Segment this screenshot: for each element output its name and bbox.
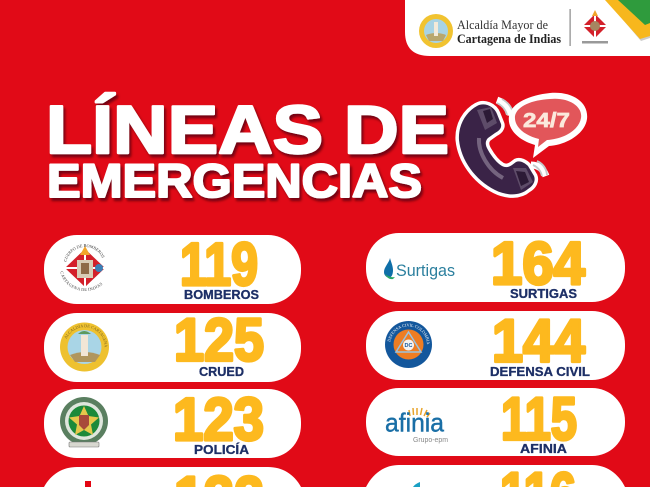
panel: defensa civil 144: 144 — [492, 308, 586, 374]
panel: surtigas 164 — [366, 230, 625, 302]
panel: crued 125: CRUED — [199, 365, 244, 379]
panel: acuacar 116 — [366, 460, 625, 487]
panel: defensa civil 144 — [366, 308, 625, 380]
sound waves — [497, 100, 546, 176]
panel: cruz roja 132 — [44, 464, 301, 487]
icon: afinia logo: Grupo-epm — [413, 437, 448, 444]
panel: bomberos 119: 119 — [180, 231, 258, 298]
icon: bomberos crest — [60, 244, 104, 291]
panel: defensa civil 144: DEFENSA CIVIL — [490, 365, 590, 379]
title: Líneas de: LÍNEAS DE — [46, 92, 449, 168]
panel: afinia 115: AFINIA — [520, 442, 567, 456]
icon: fire department crest — [582, 10, 608, 44]
icon: red cross — [85, 481, 91, 487]
panel: crued 125 — [44, 306, 301, 382]
speech bubble — [509, 93, 587, 158]
icon: afinia logo: afinia — [385, 408, 445, 438]
panel: crued 125: 125 — [174, 306, 264, 374]
title: Emergencias: EMERGENCIAS — [47, 154, 422, 207]
handset — [459, 104, 535, 194]
icon: water drop — [413, 482, 420, 487]
icon: crued seal — [60, 322, 109, 372]
panel: afinia 115 — [366, 386, 625, 456]
icon: city seal — [419, 14, 453, 48]
icon: crued seal: ALCALDÍA DE CARTAGENA — [64, 324, 108, 348]
panel: policia 123 — [44, 386, 301, 458]
panel: surtigas 164: 164 — [491, 230, 586, 297]
header text: Cartagena: Cartagena de Indias — [457, 31, 561, 46]
header logo panel — [405, 0, 650, 56]
icon: police crest — [60, 397, 108, 447]
icon: surtigas drop — [384, 258, 395, 279]
panel: bomberos 119 — [44, 231, 301, 304]
panel: surtigas 164: SURTIGAS — [510, 287, 577, 301]
icon: defensa civil seal: DEFENSA CIVIL COLOMBIANA — [388, 324, 430, 344]
panel: surtigas 164: Surtigas — [396, 262, 455, 280]
panel: bomberos 119: BOMBEROS — [184, 288, 259, 302]
icon: telephone with 24/7 speech bubble — [459, 93, 587, 194]
panel: policia 123: POLICÍA — [194, 442, 249, 457]
icon: defensa civil seal — [385, 321, 432, 368]
icon: bomberos crest: CUERPO DE BOMBEROS — [64, 244, 104, 262]
icon: bomberos crest: CARTAGENA DE INDIAS — [60, 271, 102, 291]
icon: defensa civil seal: DC — [404, 343, 412, 349]
panel: afinia 115: 115 — [501, 386, 577, 452]
panel: policia 123: 123 — [173, 386, 264, 453]
icon: telephone with 24/7 speech bubble: 24/7 — [523, 110, 570, 132]
header text: Alcaldía: Alcaldía Mayor de — [457, 17, 548, 32]
